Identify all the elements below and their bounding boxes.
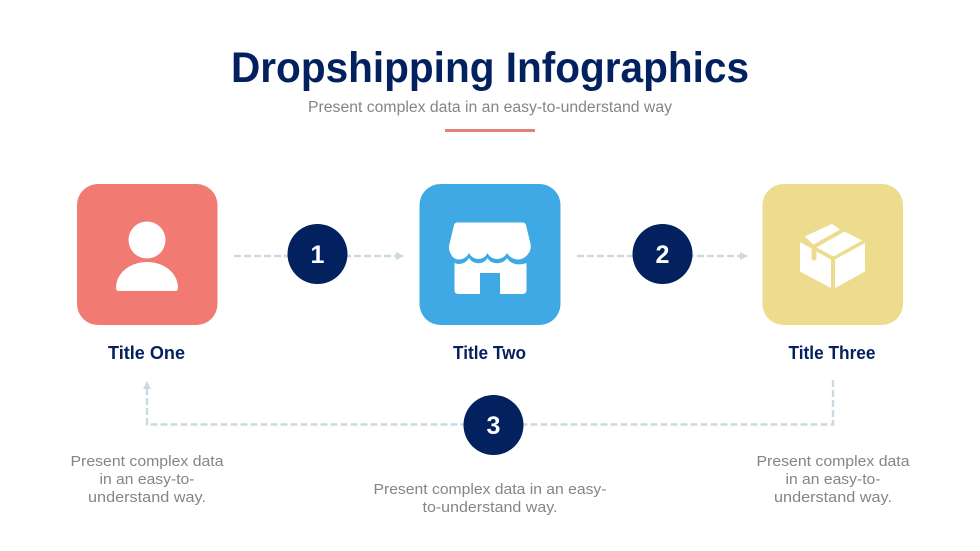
text block: left description: in an easy-to- — [100, 471, 194, 488]
panel: title three — [762, 184, 903, 363]
heading: title two: Title Two — [453, 343, 526, 363]
text block: left description: understand way. — [88, 489, 206, 506]
icon: person — [116, 222, 178, 291]
icon tile: coral — [77, 184, 218, 325]
text block: left description: Present complex data — [70, 453, 224, 470]
text block: centre description: to-understand way. — [422, 499, 558, 516]
text block: centre description — [374, 481, 606, 516]
text block: left description — [70, 453, 224, 506]
step badge 3: 3 — [487, 412, 500, 440]
title: Dropshipping Infographics — [231, 44, 749, 92]
icon tile: blue — [420, 184, 560, 325]
text block: right description: Present complex data — [756, 453, 910, 470]
text block: centre description: Present complex data in an easy- — [374, 481, 606, 498]
arrow: one to two — [234, 252, 404, 260]
heading: title one: Title One — [108, 343, 185, 363]
text block: right description: in an easy-to- — [786, 471, 880, 488]
step badge 3 — [464, 395, 524, 455]
panel: title two — [420, 184, 560, 363]
step badge 2: 2 — [656, 241, 669, 269]
text block: right description — [756, 453, 910, 506]
subtitle: Present complex data in an easy-to-understand way — [308, 99, 672, 116]
icon: storefront — [449, 222, 531, 294]
text block: right description: understand way. — [774, 489, 892, 506]
icon: parcel box — [800, 224, 865, 288]
accent underline — [445, 129, 535, 132]
arrow: three back to one — [143, 380, 833, 424]
panel: title one — [77, 184, 218, 363]
icon tile: yellow — [762, 184, 903, 325]
heading: title three: Title Three — [788, 343, 876, 363]
step badge 1 — [288, 224, 348, 284]
step badge 1: 1 — [311, 241, 325, 269]
arrow: two to three — [577, 252, 748, 260]
step badge 2 — [632, 224, 692, 284]
